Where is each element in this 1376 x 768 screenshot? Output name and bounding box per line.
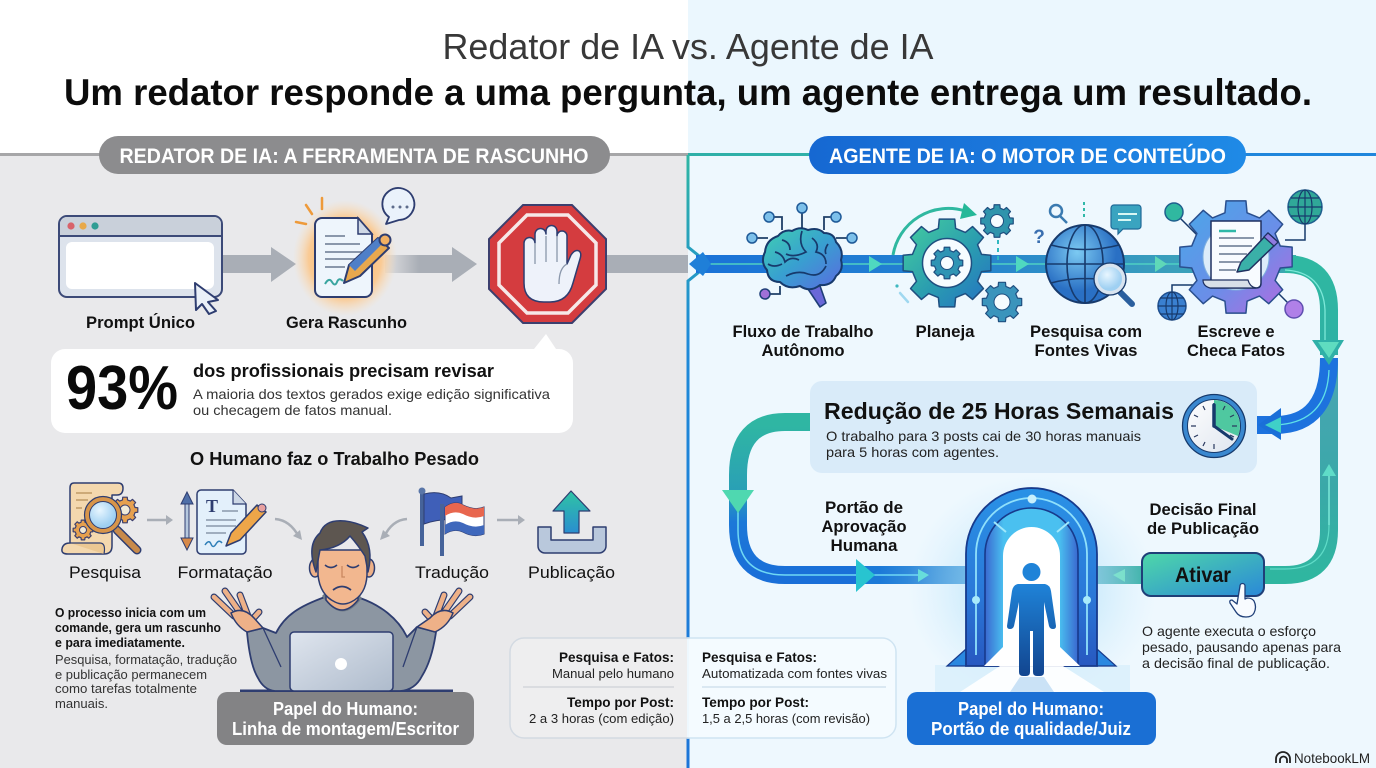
comparison: Redator column: Manual pelo humano [552,666,674,681]
label: Decisão Final de Publicação: de Publicação [1147,520,1259,538]
comparison: Redator column: 2 a 3 horas (com edição) [529,711,674,726]
label: Escreve e Checa Fatos: Checa Fatos [1187,342,1285,360]
text block: process description: Pesquisa, formatação, tradução [55,652,237,667]
label: Formatação: Formatação [178,563,272,582]
heading: Agente de IA [809,136,1246,174]
label: Fluxo de Trabalho Autônomo: Fluxo de Trabalho [732,323,874,341]
icon: formatting document with pencil: T [206,496,218,516]
label: human role, assembly line: Linha de montagem/Escritor [232,719,459,739]
label: Pesquisa com Fontes Vivas: Pesquisa com [1030,323,1142,341]
right hand [417,591,470,632]
label: Publicação: Publicação [528,563,615,582]
text block: process description: e para imediatamente. [55,635,185,650]
label: Pesquisa com Fontes Vivas [1030,323,1142,360]
label: Pesquisa: Pesquisa [69,563,142,582]
label: Decisão Final de Publicação [1147,501,1259,538]
label: Portão de Aprovação Humana [822,499,906,555]
heading: Agente de IA: AGENTE DE IA: O MOTOR DE CONTEÚDO [829,144,1226,168]
icon: formatting document with pencil [181,490,266,554]
arrow: draft to stop [385,247,477,282]
icon: research scroll with magnifier [62,483,138,554]
label: Prompt Único: Prompt Único [86,313,195,332]
label: Escreve e Checa Fatos [1187,323,1285,360]
label: Planeja: Planeja [916,323,975,341]
label: Escreve e Checa Fatos: Escreve e [1198,323,1274,341]
callout: 93% stat: A maioria dos textos gerados exige edição significativa [193,386,550,402]
flow pipe: left loop to gate [722,422,968,592]
card: 25-hour weekly reduction [810,381,1257,473]
flow pipe: loop to reduction card [1257,264,1344,440]
flow pipe: right loop to activate button [1264,360,1336,575]
text block: process description: como tarefas totalmente [55,681,197,696]
illustration: tired human at laptop [214,521,470,691]
label: Portão de Aprovação Humana: Portão de [825,499,903,517]
illustration: approval gate with human [907,475,1157,705]
icon: globe research [1033,202,1141,304]
title [64,26,1312,113]
card: 25-hour weekly reduction: Redução de 25 Horas Semanais [824,398,1174,424]
icon: globe research: ? [1033,227,1045,248]
text block: process description: e publicação permanecem [55,667,207,682]
icon: draft document with pen [293,188,414,316]
comparison: Agente column: Automatizada com fontes vivas [702,666,888,681]
panel: Redator de IA [0,136,690,768]
arrow: research to formatting [147,515,173,525]
comparison: Redator column [523,649,674,726]
label: human role, assembly line [217,692,474,745]
heading: Redator de IA [99,136,610,174]
arrow: prompt to draft [222,247,296,282]
icon: stop sign with hand [489,205,606,323]
callout: 93% stat: dos profissionais precisam revisar [193,360,494,381]
laptop [290,632,393,691]
heading: Redator de IA: REDATOR DE IA: A FERRAMENTA DE RASCUNHO [120,145,588,168]
arrow: stop to agent [606,255,690,273]
icon: autonomous brain [747,203,857,307]
label: Tradução: Tradução [415,563,489,582]
icon: publication upload tray [538,491,606,553]
callout: 93% stat: ou checagem de fatos manual. [193,402,392,418]
title: Redator de IA vs. Agente de IA [442,26,934,67]
panel: Agente de IA [688,136,1376,768]
text block: process description [55,605,237,711]
flow pipe: main workflow [689,252,1296,276]
left hand [214,591,263,632]
text block: agent description: pesado, pausando apenas para [1142,639,1341,655]
comparison: Agente column: Pesquisa e Fatos: [702,649,817,665]
icon: browser prompt window [59,216,222,314]
icon: clock [1182,394,1246,458]
heading: O Humano faz o Trabalho Pesado: O Humano faz o Trabalho Pesado [190,449,479,469]
label: Portão de Aprovação Humana: Humana [830,537,898,555]
label: human role, quality gate: Portão de qualidade/Juiz [931,719,1131,739]
text block: process description: comande, gera um rascunho [55,620,221,635]
button: Ativar with pointer [1142,553,1264,617]
text block: agent description: O agente executa o esforço [1142,623,1316,639]
label: human role, quality gate: Papel do Humano: [958,699,1104,719]
callout: 93% stat: 93% [66,354,178,423]
icon: translation flags [418,488,484,556]
label: Pesquisa com Fontes Vivas: Fontes Vivas [1034,342,1138,360]
arrow: translation to human [380,519,407,540]
flow pipe: button to gate [1095,566,1145,584]
label: Fluxo de Trabalho Autônomo [732,323,874,360]
icon: planning gears [893,203,1022,322]
label: Gera Rascunho: Gera Rascunho [286,313,407,332]
text block: agent description [1142,623,1341,671]
text block: process description: O processo inicia com um [55,605,206,620]
logo: NotebookLM: NotebookLM [1294,750,1370,766]
comparison: Agente column [702,649,888,726]
button: Ativar with pointer: Ativar [1175,564,1231,587]
card: 25-hour weekly reduction: O trabalho para 3 posts cai de 30 horas manuais [826,428,1141,444]
human silhouette [1007,563,1056,676]
label: Decisão Final de Publicação: Decisão Final [1150,501,1256,519]
label: human role, assembly line: Papel do Humano: [273,699,418,719]
icon: write and fact-check gear [1158,190,1322,320]
text block: process description: manuais. [55,696,108,711]
callout: 93% stat [51,334,573,433]
label: Fluxo de Trabalho Autônomo: Autônomo [762,342,844,360]
arrow: translation to publication [497,515,525,525]
comparison table [510,638,896,738]
comparison: Agente column: 1,5 a 2,5 horas (com revisão) [702,711,870,726]
title: Um redator responde a uma pergunta, um agente entrega um resultado. [64,72,1312,113]
card: 25-hour weekly reduction: para 5 horas com agentes. [826,444,999,460]
comparison: Redator column: Pesquisa e Fatos: [559,649,674,665]
arrow: formatting to human [275,519,302,540]
label: human role, quality gate [907,692,1156,745]
text block: agent description: a decisão final de publicação. [1142,655,1330,671]
label: Portão de Aprovação Humana: Aprovação [822,518,906,536]
comparison: Agente column: Tempo por Post: [702,694,809,710]
comparison: Redator column: Tempo por Post: [567,694,674,710]
